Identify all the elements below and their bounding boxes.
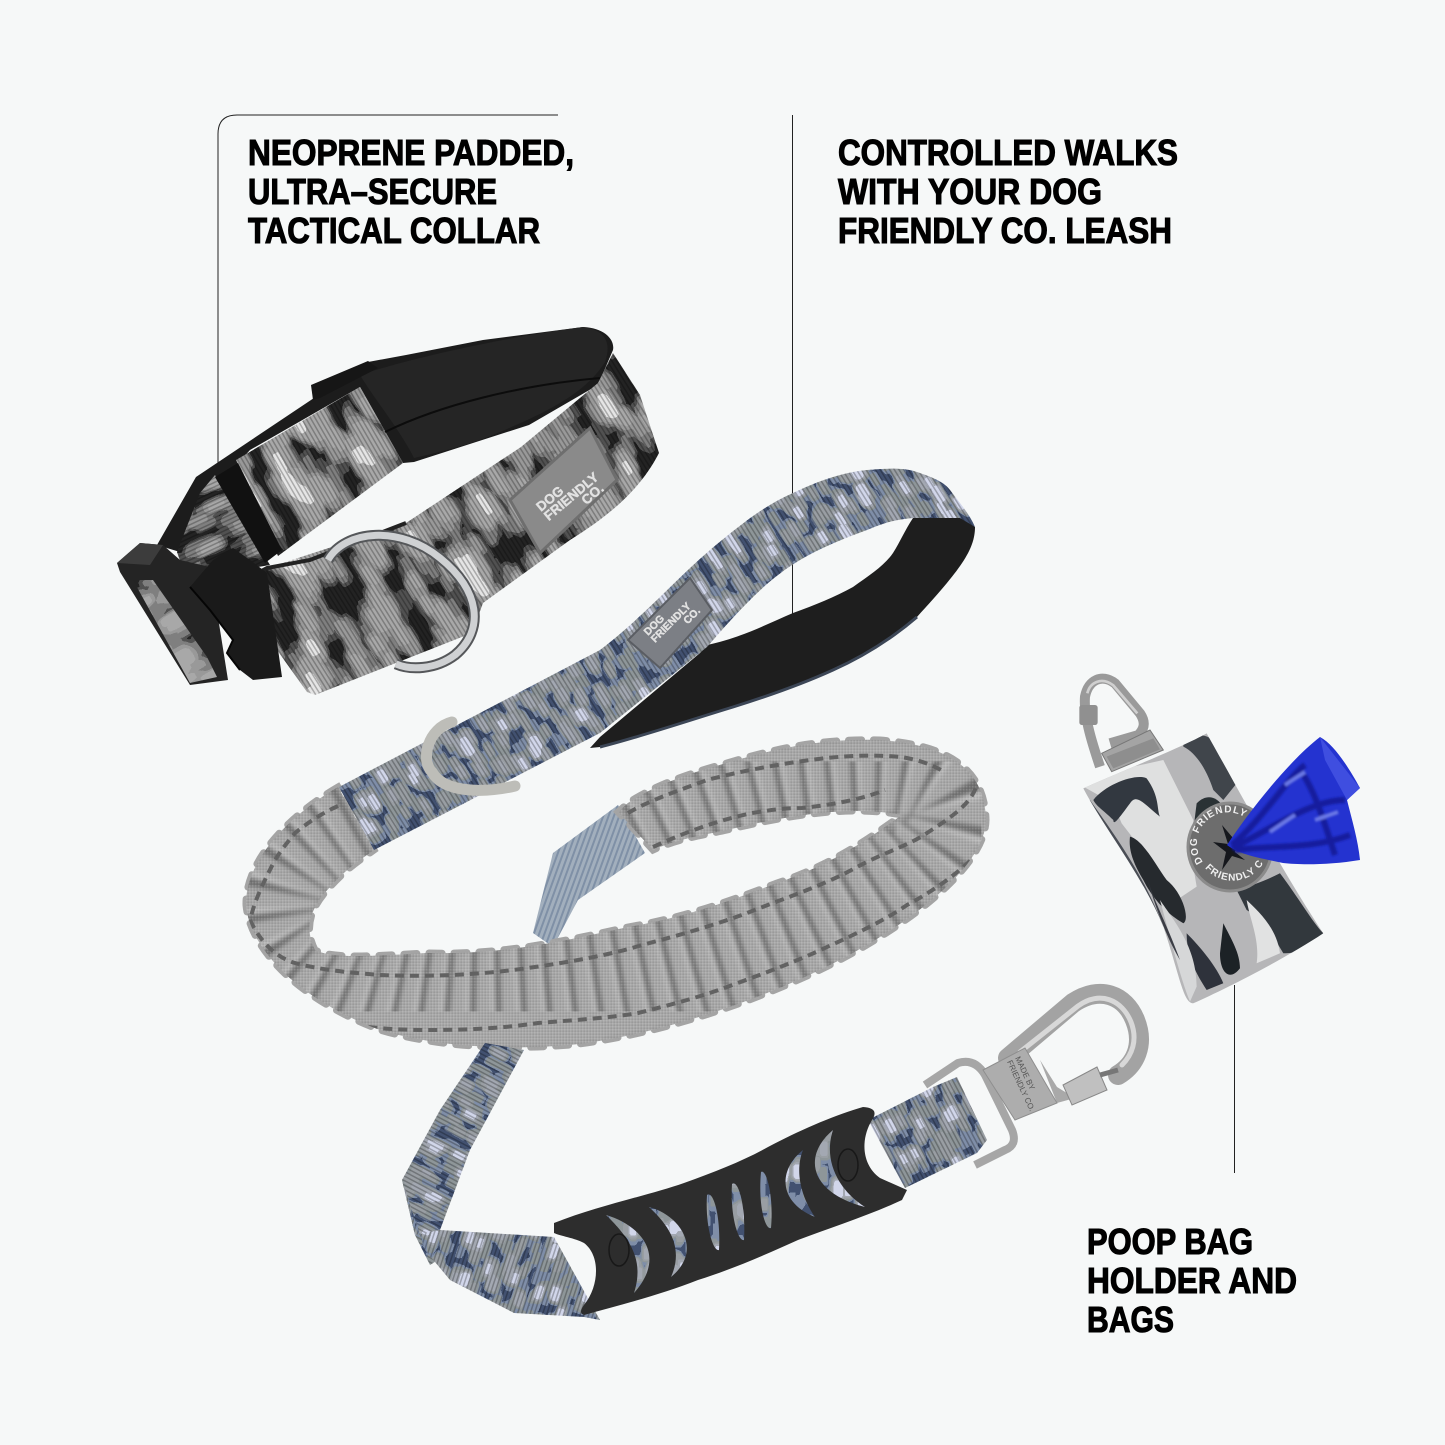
holder: blue bag [1227, 737, 1360, 864]
collar: logo patch: FRIENDLY [541, 469, 601, 523]
heading: collar [248, 132, 574, 251]
heading: collar: TACTICAL COLLAR [248, 210, 540, 251]
collar: buckle edge highlight [190, 587, 240, 670]
grip: end ovals [838, 1149, 858, 1181]
bungee: ribs [246, 740, 986, 1048]
bungee: top band stitching [628, 756, 941, 813]
leash: lower strand bend [402, 1181, 600, 1320]
collar: black webbing [215, 463, 282, 563]
heading: leash [838, 132, 1178, 251]
leash: D-ring [426, 722, 515, 790]
collar: logo patch: CO. [579, 481, 607, 508]
leash: handle padding edge [600, 617, 917, 747]
heading: leash: WITH YOUR DOG [838, 171, 1102, 212]
holder: round badge: DOG FRIENDLY [1190, 806, 1248, 865]
snap hook: lower arm [1040, 1060, 1075, 1103]
leash: logo patch: CO. [681, 605, 703, 627]
leash: lower strand behind bungee [533, 805, 645, 947]
holder: camo pouch [1083, 733, 1323, 1003]
heading: poop bag holder: POOP BAG [1087, 1221, 1253, 1262]
heading: poop bag holder: HOLDER AND [1087, 1260, 1297, 1301]
snap hook: lock barrel [1063, 1067, 1107, 1105]
heading: leash: CONTROLLED WALKS [838, 132, 1178, 173]
poop bag holder [1079, 674, 1360, 1004]
leash: rubber grip [554, 1100, 907, 1315]
bag: translucent corner [1320, 737, 1360, 800]
heading: poop bag holder [1087, 1221, 1297, 1340]
collar: black rim [157, 327, 613, 552]
bungee: top band lower stitching [653, 790, 885, 847]
snap hook: carabiner [1008, 994, 1139, 1075]
leash: strap to snap hook [870, 1077, 987, 1188]
collar: logo patch [510, 428, 617, 553]
leash: snap hook [925, 994, 1139, 1165]
collar: logo patch: DOG [533, 483, 566, 514]
bungee: lower stitching [368, 859, 970, 1032]
collar: inner camo behind buckle [177, 475, 270, 567]
heading: leash: FRIENDLY CO. LEASH [838, 210, 1172, 251]
snap hook: rectangular loop [925, 1062, 1014, 1165]
collar: near band top edge [232, 523, 406, 587]
bungee: scalloped outline [246, 740, 986, 1047]
bungee: left stitching [250, 806, 338, 920]
bungee section [230, 730, 1000, 1060]
collar: near camo band [265, 353, 659, 695]
heading: collar: NEOPRENE PADDED, [248, 132, 574, 173]
snap hook: highlight [1020, 998, 1134, 1065]
grip: camo windows [606, 1130, 865, 1293]
snap hook: lock pin [1100, 1070, 1118, 1075]
leash: logo patch: FRIENDLY [649, 600, 694, 645]
collar: buckle top highlight [117, 543, 163, 565]
leash: logo patch [628, 578, 712, 668]
holder: round badge: FRIENDLY CO. [1206, 860, 1262, 881]
heading: collar: ULTRA–SECURE [248, 171, 497, 212]
bungee: upper stitching [250, 787, 976, 976]
collar: slider buckle [311, 361, 378, 400]
collar: far camo strap [236, 387, 403, 556]
snap hook: engraving: FRIENDLY CO. [1005, 1059, 1037, 1113]
callout line: poop bag holder [1234, 985, 1236, 1173]
collar: camo inside buckle [137, 580, 217, 683]
bag: folds [1232, 765, 1350, 855]
leash: upper strap and handle [339, 468, 975, 850]
leash: black handle padding [590, 510, 975, 748]
collar: D-ring [328, 535, 474, 668]
callout line: leash [792, 115, 794, 642]
collar: neoprene padding [360, 327, 608, 458]
holder: carabiner clip [1079, 679, 1163, 772]
snap hook: body [983, 1048, 1057, 1120]
collar: buckle right [190, 548, 282, 680]
snap hook: engraving: MADE BY [1013, 1055, 1037, 1092]
collar: buckle left frame [117, 543, 228, 685]
leash: logo patch: DOG [642, 613, 667, 638]
collar [117, 327, 659, 695]
leash: lower strand down [402, 1043, 524, 1265]
holder: round badge [1186, 802, 1272, 892]
collar: padding seam [385, 378, 600, 432]
heading: poop bag holder: BAGS [1087, 1299, 1174, 1340]
callout line: collar [218, 115, 558, 485]
